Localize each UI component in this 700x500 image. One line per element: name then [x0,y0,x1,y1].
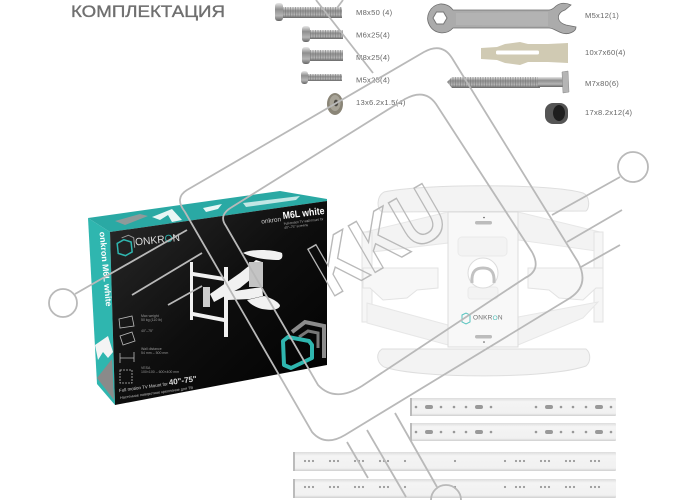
logo: ONKRON [135,232,181,249]
logo [116,230,181,256]
rail: lower long 2 [293,479,616,498]
product box: 54 mm – 500 mm [141,351,168,355]
upper left arm [365,212,448,252]
rail: upper short 2 [410,423,616,441]
bottom pad [378,349,590,376]
big logo [283,322,324,368]
watermark outer rounded frame [180,48,583,440]
watermark inner rounded frame [223,95,536,394]
icon: bolt M5x25 [301,71,342,84]
title: КОМПЛЕКТАЦИЯ [71,2,225,21]
plate logo [462,313,503,324]
icon: rubber cap [545,103,568,124]
labels: left hardware column: M8x50 (4) [356,8,393,17]
labels: right hardware column: 17x8.2x12(4) [585,108,633,117]
labels: right hardware column [585,11,633,117]
watermark left circuit node [49,230,202,317]
side label: onkron M6L white [98,231,114,307]
wall mount: white product [362,186,603,376]
rail: lower long 1 [293,452,616,471]
side chevrons [95,336,114,400]
middle arms [363,268,438,300]
box top face [88,191,327,232]
product box: VESA [141,366,151,370]
upper right arm [518,212,600,251]
labels: right hardware column: 10x7x60(4) [585,48,626,57]
icon: bolt M6x25 [302,26,343,42]
plate recess [458,237,507,256]
labels: left hardware column: M6x25(4) [356,30,390,40]
icon: bolt M8x25 [302,47,343,64]
rail: upper short 1 [410,398,616,416]
product box: 100×100 – 600×400 mm [141,370,179,374]
box left side [88,218,115,405]
product box: Max weight [141,314,159,318]
watermark bottom node [347,413,461,500]
icon: washer [327,93,343,115]
product box: Wall distance [141,347,162,351]
bottom tagline: Настенное поворотное крепление для ТВ [120,386,194,400]
plate slots [475,217,492,343]
product box [88,191,327,405]
labels: right hardware column: M5x12(1) [585,11,619,20]
mount illustration [190,250,282,337]
product name: Full-motion TV wall mount for [283,217,324,226]
product box: 50 kg (110 lb) [141,318,162,322]
icon: bolt M8x50 [275,3,342,21]
product name: 40"–75" screens [284,223,309,230]
watermark top lines [316,0,373,73]
product name: M6L white [282,206,326,222]
watermark text: KKU [296,167,461,313]
plate center joint [468,258,498,299]
lower arms [367,303,448,345]
spec icons and specs [119,316,135,383]
labels: left hardware column: 13x6.2x1.5(4) [356,98,406,107]
product name: onkron [261,216,282,226]
top pad [378,186,589,212]
labels: right hardware column: M7x80(6) [585,79,619,88]
icon: lag screw [447,71,569,93]
labels: left hardware column: M8x25(4) [356,53,390,62]
icon: wall plug [481,42,568,65]
product name [260,206,327,233]
product box: 40"–75" [141,329,154,333]
bottom tagline: Full motion TV Mount for 40"-75" [118,374,197,394]
labels: left hardware column: M5x25(4) [356,76,390,84]
outer posts [362,232,372,322]
watermark right circuit node [552,152,648,267]
box top print [152,196,300,222]
labels: left hardware column [356,8,406,107]
plate logo: ONKRON [473,315,503,322]
center plate [448,212,518,347]
box front [110,201,327,405]
icon: wrench [428,3,576,34]
